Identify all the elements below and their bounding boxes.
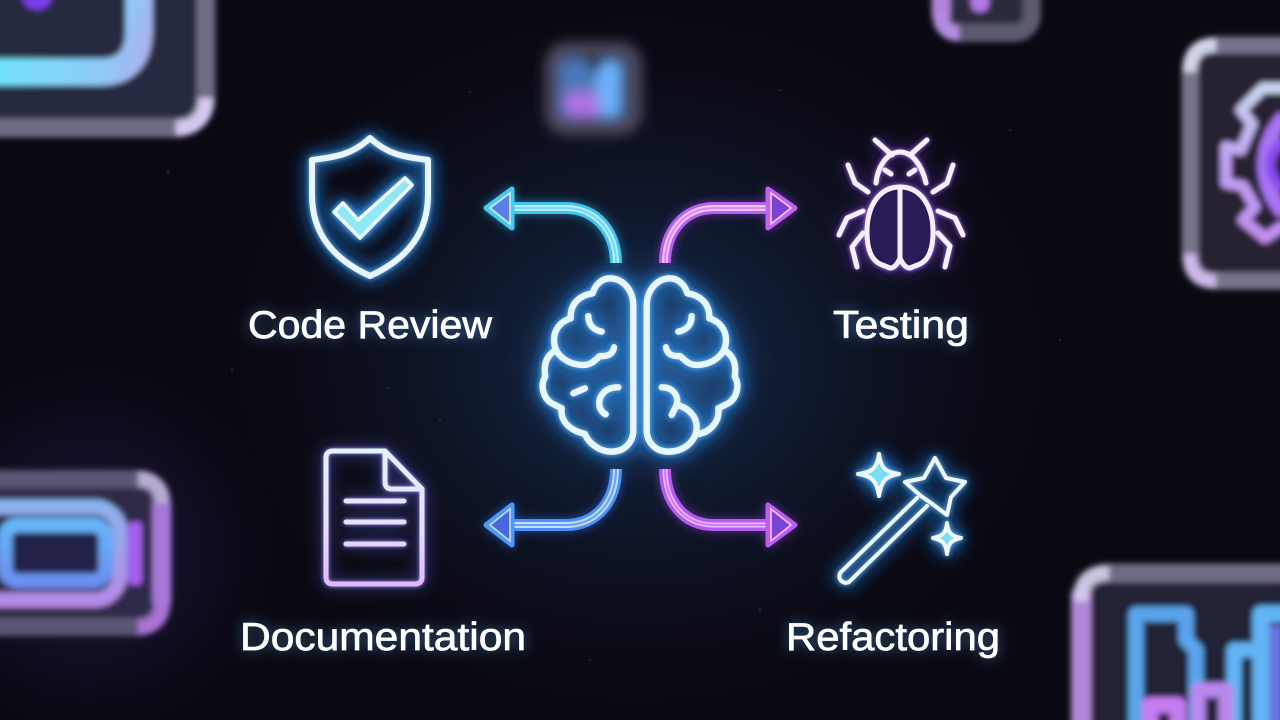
panel: blurred tile, top right bbox=[941, 0, 1032, 33]
icon: gear bbox=[1226, 88, 1280, 238]
panel: blurred gear tile, right edge bbox=[1190, 45, 1280, 281]
arrow: brain to testing bbox=[665, 189, 795, 263]
panel: blurred battery icon tile bbox=[0, 479, 162, 627]
panel: blurred bar chart tile, bottom right bbox=[1081, 573, 1280, 720]
panel: blurred chart tile, top centre bbox=[552, 49, 635, 128]
icon: brain bbox=[543, 278, 737, 452]
arrow: brain to documentation bbox=[486, 469, 616, 545]
icon: magic wand bbox=[839, 454, 965, 583]
arrow: brain to code review bbox=[486, 189, 616, 263]
icon: shield with check bbox=[312, 138, 428, 276]
icon: bug bbox=[839, 140, 963, 268]
arrow: brain to refactoring bbox=[665, 469, 795, 545]
label: Code Review: Code Review bbox=[248, 304, 493, 347]
panel: blurred top-left icon tile bbox=[0, 0, 206, 128]
label: Testing: Testing bbox=[833, 304, 969, 347]
soft glow behind brain bbox=[548, 283, 732, 447]
icon: document bbox=[326, 451, 422, 584]
label: Documentation: Documentation bbox=[240, 616, 526, 659]
chart: blurred bars bbox=[1136, 614, 1280, 720]
label: Refactoring: Refactoring bbox=[786, 616, 1000, 659]
